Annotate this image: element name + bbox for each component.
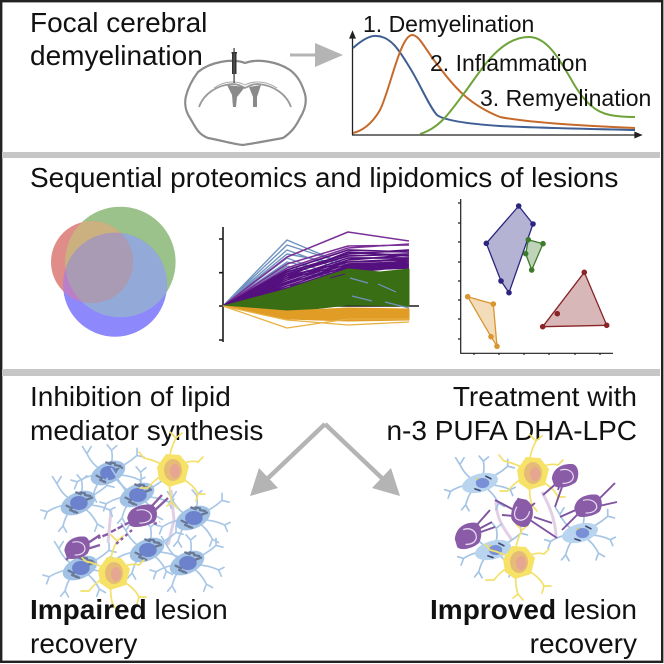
label: 2. Inflammation: 2. Inflammation [430,50,587,76]
chart: venn diagram [51,207,176,337]
chart: lesion phases over time [350,11,651,138]
icon: brain section with injection needle [185,48,306,145]
arrow: to timeline chart [290,43,343,67]
heading: focal cerebral demyelination: Focal cerebral [30,7,207,38]
arrows: diverging outcomes [250,424,400,496]
cluster: green [523,237,545,272]
cluster: purple [484,204,535,295]
cluster: orange [465,294,499,349]
cluster: red [540,270,609,329]
chart: protein time course lines [219,227,419,342]
heading: inhibition of lipid mediator synthesis: mediator synthesis [30,415,263,446]
heading: treatment with DHA-LPC: Treatment with [453,381,637,412]
chart: scatter with convex hulls [458,199,613,355]
illustration: improved lesion cells [445,435,617,600]
orange mass [223,306,409,321]
green mass [223,269,409,312]
caption: impaired lesion recovery: Impaired [30,594,147,625]
label: 1. Demyelination: 1. Demyelination [363,11,534,37]
heading: focal cerebral demyelination: demyelination [30,40,203,71]
heading: inhibition of lipid mediator synthesis: Inhibition of lipid [30,381,231,412]
heading: treatment with DHA-LPC: n-3 PUFA DHA-LPC [386,415,637,446]
caption: impaired lesion recovery: lesion [147,594,228,625]
illustration: impaired lesion cells [41,432,230,611]
heading: sequential proteomics and lipidomics: Sequential proteomics and lipidomics of lesions [30,162,618,193]
caption: improved lesion recovery: Improved lesion [430,594,637,625]
caption: improved lesion recovery: recovery [530,628,637,659]
caption: impaired lesion recovery: recovery [30,628,137,659]
label: 3. Remyelination: 3. Remyelination [480,85,651,111]
